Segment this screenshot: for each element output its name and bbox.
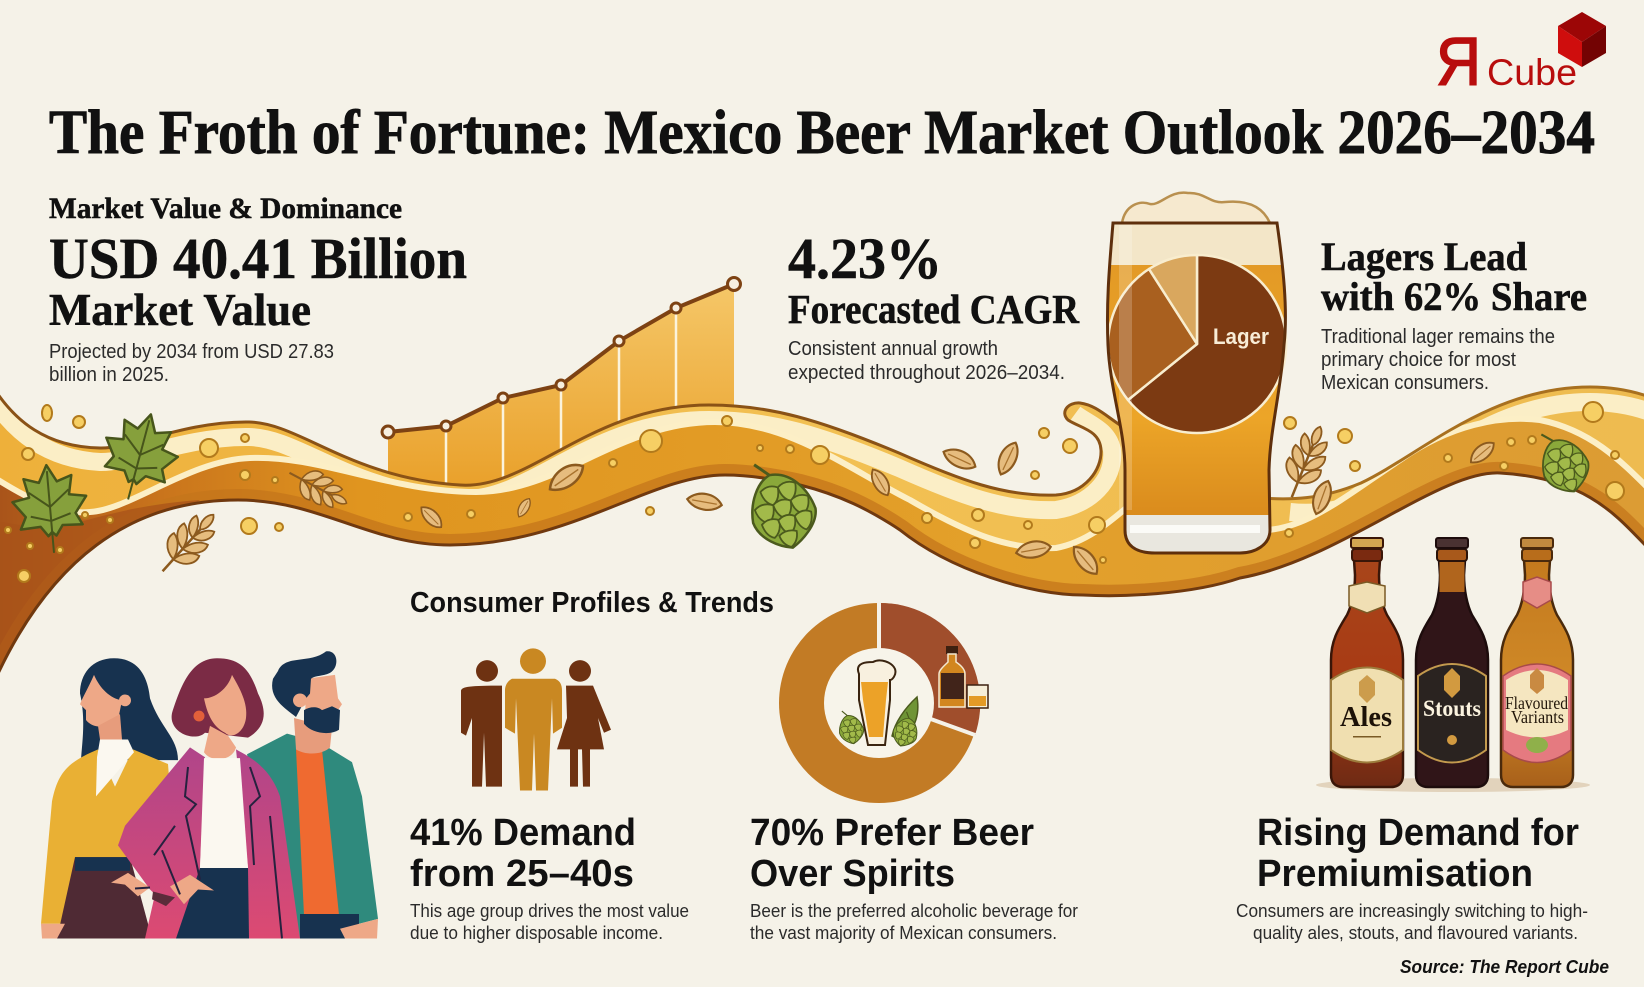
- logo: RCube: Cube: [1487, 52, 1577, 93]
- text: CAGR description: Consistent annual growth: [788, 338, 998, 360]
- illustration: three consumers: [41, 651, 378, 938]
- stat: 41 percent demand: 41% Demand: [410, 812, 636, 854]
- deep orange lower band: [0, 417, 1644, 645]
- stat: CAGR: 4.23%: [788, 226, 942, 291]
- text: beer preference description: the vast majority of Mexican consumers.: [750, 922, 1057, 943]
- dark band along lower edge: [212, 462, 1644, 594]
- bottle shadow: [1316, 778, 1590, 792]
- text: lager description: [1321, 326, 1555, 394]
- stat: CAGR: [788, 226, 1079, 332]
- stat: 70 percent prefer beer: [750, 812, 1034, 895]
- person: woman in magenta jacket: [111, 658, 300, 938]
- bottle: flavoured variants: Flavoured: [1505, 693, 1568, 713]
- icon: beer glass with hops: [836, 660, 924, 750]
- bottle: stouts: [1416, 538, 1488, 787]
- icon: whisky bottle and glass: [939, 646, 988, 708]
- icon: hop cone right: [1531, 423, 1596, 499]
- text: beer preference description: Beer is the preferred alcoholic beverage for: [750, 900, 1078, 921]
- icon: hop cone centre: [739, 452, 824, 556]
- bottle: stouts: Stouts: [1423, 696, 1481, 721]
- text: lager description: Mexican consumers.: [1321, 372, 1489, 394]
- pie label: Lager: [1213, 324, 1269, 349]
- icon: maple leaf upper: [92, 405, 187, 509]
- section heading: market value and dominance: Market Value & Dominance: [49, 192, 402, 225]
- icon: wheat sprig on wave: [282, 460, 354, 516]
- pie chart: lager share: [1108, 255, 1286, 433]
- beer wave ribbon: [0, 386, 1644, 673]
- text: beer preference description: [750, 900, 1078, 943]
- text: age group description: This age group drives the most value: [410, 900, 689, 921]
- stat: rising demand for premiumisation: Premiumisation: [1257, 853, 1533, 895]
- glass highlight: [1119, 225, 1132, 510]
- text: CAGR description: [788, 338, 1065, 384]
- logo: RCube: Я: [1436, 24, 1481, 100]
- stat: market value: Market Value: [49, 285, 311, 335]
- person: man: [247, 651, 378, 938]
- text: premiumisation description: [1236, 900, 1588, 943]
- stat: rising demand for premiumisation: Rising Demand for: [1257, 812, 1579, 854]
- text: CAGR description: expected throughout 2026–2034.: [788, 362, 1065, 384]
- text: premiumisation description: Consumers are increasingly switching to high-: [1236, 900, 1588, 921]
- brown left corner: [0, 500, 200, 666]
- text: age group description: due to higher disposable income.: [410, 922, 663, 943]
- stat: market value: USD 40.41 Billion: [49, 226, 467, 291]
- text: market value description: [49, 341, 334, 386]
- bottle: ales: Ales: [1340, 702, 1392, 733]
- text: lager description: Traditional lager remains the: [1321, 326, 1555, 348]
- barley grains: [417, 438, 1498, 579]
- icon: wheat sprig beside glass: [1275, 420, 1337, 504]
- bottle: flavoured variants: [1501, 538, 1573, 787]
- text: market value description: Projected by 2034 from USD 27.83: [49, 341, 334, 363]
- stat: lager share: Lagers Lead: [1321, 234, 1527, 279]
- bottles: ales, stouts, flavoured variants: [1316, 538, 1590, 792]
- stat: 70 percent prefer beer: 70% Prefer Beer: [750, 812, 1034, 854]
- icon: wheat sprig below wave: [149, 503, 227, 583]
- stat: lager share: with 62% Share: [1321, 274, 1587, 319]
- text: lager description: primary choice for most: [1321, 349, 1516, 371]
- stat: 41 percent demand: from 25–40s: [410, 853, 634, 895]
- person: woman in yellow: [41, 658, 178, 938]
- text: age group description: [410, 900, 689, 943]
- foam top: [1122, 193, 1270, 223]
- stat: market value: [49, 226, 467, 335]
- text: market value description: billion in 2025.: [49, 364, 169, 386]
- donut chart: beer vs spirits: [779, 603, 988, 803]
- logo: RCube: [1436, 12, 1606, 100]
- stat: CAGR: Forecasted CAGR: [788, 286, 1079, 332]
- section heading: consumer profiles: Consumer Profiles & Trends: [410, 587, 774, 619]
- bottle: ales: [1331, 538, 1403, 787]
- text: premiumisation description: quality ales, stouts, and flavoured variants.: [1253, 922, 1578, 943]
- bottle: flavoured variants: Variants: [1511, 707, 1564, 727]
- stat: 41 percent demand: [410, 812, 636, 895]
- bar and line chart: market value growth: [382, 278, 740, 490]
- stat: rising demand for premiumisation: [1257, 812, 1579, 895]
- stat: 70 percent prefer beer: Over Spirits: [750, 853, 955, 895]
- stat: lager share: [1321, 234, 1587, 319]
- icon: people group: [461, 648, 611, 791]
- source note: Source: The Report Cube: [1400, 957, 1609, 977]
- icon: maple leaf lower: [9, 462, 91, 556]
- foam highlight band: [0, 402, 1644, 513]
- bubbles and droplets: [5, 402, 1624, 582]
- beer glass with lager pie chart: [1100, 193, 1290, 555]
